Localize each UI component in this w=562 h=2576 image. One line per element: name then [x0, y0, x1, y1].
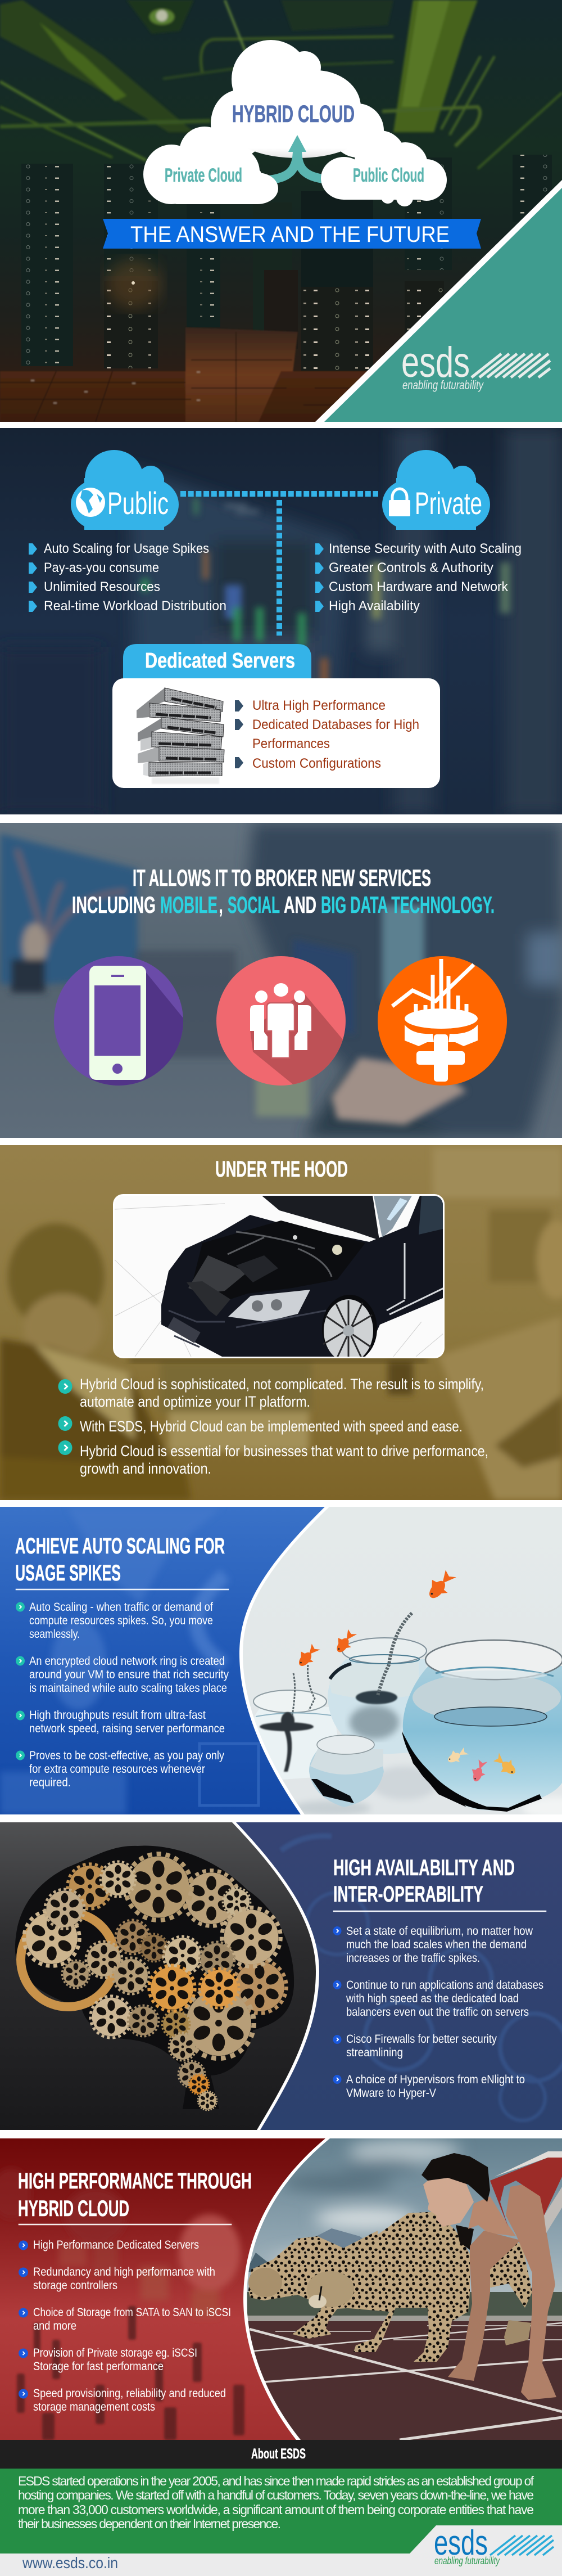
- bowl: front: [309, 1735, 384, 1807]
- list: performance points: Storage for fast performance: [33, 2359, 164, 2373]
- logo: esds blue: esds: [434, 2524, 488, 2563]
- icon: bullet one: [333, 1926, 342, 1935]
- cloud: public cloud: Public Cloud: [353, 165, 424, 186]
- panel: dedicated servers card: [112, 644, 440, 788]
- photo: car with open hood: [113, 1194, 445, 1363]
- icon: social group: [216, 956, 348, 1088]
- list: performance points: Speed provisioning, reliability and reduced: [33, 2386, 226, 2400]
- fish: jumping orange: [294, 1566, 459, 1670]
- list: performance points: High Performance Dedicated Servers: [33, 2238, 199, 2251]
- fish: in the large bowl: [445, 1745, 520, 1784]
- list: auto scaling points: around your VM to ensure that rich security: [29, 1668, 229, 1681]
- list: auto scaling points: for extra compute resources whenever: [29, 1763, 205, 1776]
- list: auto scaling points: compute resources spikes. So, you move: [29, 1614, 213, 1627]
- list: auto scaling points: An encrypted cloud network ring is created: [29, 1655, 225, 1668]
- list: availability points: streamlining: [346, 2046, 403, 2059]
- figure: sprinter: [422, 2151, 562, 2400]
- heading: HYBRID CLOUD: HYBRID CLOUD: [232, 101, 355, 128]
- panel: dark brain background: [0, 1822, 319, 2130]
- list: public benefits: [29, 541, 226, 614]
- list: dedicated server features: Custom Configurations: [252, 756, 381, 771]
- heading: high performance: HYBRID CLOUD: [18, 2196, 129, 2221]
- photo: runner and cheetahs: [236, 2138, 562, 2440]
- panel: hero with data-centre photo: [0, 0, 562, 422]
- icon: mobile: [54, 956, 183, 1091]
- panel: about ESDS text: ESDS started operations in the year 2005, and has since then made rapid strides as an established group of: [18, 2474, 534, 2488]
- icon: bullet two: [19, 2268, 28, 2277]
- decoration: teal corner triangle with white stripe: [315, 180, 562, 422]
- panel: about ESDS heading band: About ESDS: [251, 2446, 306, 2462]
- list: dedicated server features: [235, 698, 419, 771]
- list: under the hood points: [58, 1376, 488, 1477]
- list: auto scaling points: required.: [29, 1776, 71, 1789]
- icon: bullet one: [19, 2241, 28, 2250]
- list: auto scaling points: network speed, raising server performance: [29, 1722, 225, 1735]
- heading: under the hood: UNDER THE HOOD: [215, 1157, 348, 1182]
- heading: broker new services: MOBILE: [160, 891, 217, 918]
- bowl: left: [252, 1665, 338, 1780]
- cloud: public cloud: [321, 130, 447, 206]
- list: public benefits: Auto Scaling for Usage Spikes: [44, 541, 209, 556]
- logo: esds white: [402, 346, 551, 391]
- list: availability points: VMware to Hyper-V: [346, 2087, 436, 2100]
- panel: about ESDS text: their businesses dependent on their Internet presence.: [18, 2516, 281, 2531]
- heading: achieve auto scaling: ACHIEVE AUTO SCALING FOR: [15, 1534, 225, 1559]
- icon: bullet four: [16, 1750, 25, 1760]
- cloud: private cloud: Private Cloud: [165, 165, 242, 186]
- list: performance points: Redundancy and high performance with: [33, 2265, 215, 2278]
- list: under the hood points: automate and optimize your IT platform.: [80, 1393, 310, 1410]
- icon: bullet two: [333, 1980, 342, 1989]
- heading: high performance: [18, 2169, 252, 2225]
- heading: broker new services: ,: [219, 891, 223, 918]
- list: private benefits: [315, 541, 522, 614]
- icon: globe: [76, 488, 105, 517]
- cloud: private badge: Private: [415, 485, 482, 521]
- list: auto scaling points: [16, 1601, 229, 1789]
- photo: fish jumping between bowls: [225, 1507, 562, 1820]
- logo: esds white: esds: [401, 339, 470, 386]
- list: private benefits: Custom Hardware and Network: [329, 579, 509, 595]
- icon: teal bullet two: [58, 1416, 72, 1431]
- panel: navy text background: [225, 1822, 562, 2130]
- list: performance points: and more: [33, 2319, 76, 2332]
- photo: data centre background: [0, 0, 562, 422]
- icon: bullet three: [333, 2035, 342, 2044]
- logo: esds blue: [434, 2524, 554, 2566]
- cloud: public badge: Public: [107, 485, 169, 521]
- list: under the hood points: Hybrid Cloud is sophisticated, not complicated. The result is to simplify,: [80, 1376, 484, 1393]
- list: auto scaling points: High throughputs result from ultra-fast: [29, 1709, 206, 1722]
- list: under the hood points: Hybrid Cloud is essential for businesses that want to drive performance,: [80, 1443, 488, 1460]
- list: auto scaling points: seamlessly.: [29, 1628, 80, 1641]
- list: auto scaling points: is maintained while auto scaling takes place: [29, 1682, 227, 1695]
- icon: bullet three: [16, 1711, 25, 1720]
- icon: bullet four: [19, 2349, 28, 2358]
- panel: new services: [0, 823, 562, 1138]
- list: availability points: [333, 1925, 543, 2100]
- list: performance points: [19, 2238, 231, 2413]
- list: dedicated server features: Dedicated Databases for High: [252, 717, 419, 732]
- icon: teal bullet one: [58, 1379, 72, 1394]
- list: under the hood points: growth and innovation.: [80, 1460, 211, 1477]
- bowl: large: [402, 1640, 562, 1812]
- list: availability points: much the load scales when the demand: [346, 1938, 527, 1951]
- list: availability points: increases or the traffic spikes.: [346, 1952, 480, 1965]
- heading: high availability: INTER-OPERABILITY: [333, 1882, 483, 1907]
- icon: bullet five: [19, 2389, 28, 2398]
- heading: broker new services: [72, 864, 495, 918]
- photo: blurred server background: [0, 428, 562, 816]
- panel: dedicated servers card: Dedicated Servers: [145, 649, 295, 673]
- heading: broker new services: SOCIAL: [228, 891, 280, 918]
- bowl: medium: [328, 1613, 427, 1754]
- animal: rear cheetah: [248, 2231, 382, 2339]
- heading: achieve auto scaling: USAGE SPIKES: [15, 1561, 121, 1586]
- icon: bullet one: [16, 1602, 25, 1612]
- list: dedicated server features: Performances: [252, 736, 330, 751]
- list: public benefits: Unlimited Resources: [44, 579, 160, 595]
- cloud: public badge: [71, 450, 179, 530]
- photo: call-centre background in gold tint: [0, 1145, 562, 1500]
- cloud: hybrid cloud: [211, 40, 384, 158]
- animal: front cheetah: [307, 2212, 470, 2362]
- banner: the answer and the future: THE ANSWER AND THE FUTURE: [130, 222, 450, 247]
- panel: blue text background: [0, 1507, 329, 1814]
- panel: achieve auto scaling: [0, 1507, 562, 1820]
- heading: high performance: HIGH PERFORMANCE THROUGH: [18, 2169, 252, 2194]
- list: performance points: Provision of Private storage eg. iSCSI: [33, 2346, 197, 2359]
- cloud: private badge: [382, 450, 490, 530]
- list: private benefits: Intense Security with Auto Scaling: [329, 541, 522, 556]
- list: dedicated server features: Ultra High Performance: [252, 698, 386, 713]
- panel: high performance: [0, 2138, 562, 2440]
- panel: about ESDS text: [0, 2469, 562, 2554]
- photo: blurred touch-screen background: [0, 823, 562, 1138]
- panel: about ESDS heading band: [0, 2440, 562, 2469]
- illustration: brain made of gears: [15, 1846, 294, 2110]
- cloud: private cloud: [143, 127, 278, 204]
- panel: about ESDS text: hosting companies. We started off with a handful of customers. Today, seven years down-the-line, we have: [18, 2488, 534, 2502]
- panel: public, private and dedicated: [0, 428, 562, 816]
- list: private benefits: High Availability: [329, 598, 420, 614]
- heading: high availability: [333, 1856, 546, 1912]
- text: website: www.esds.co.in: [22, 2554, 118, 2572]
- panel: high availability: [0, 1822, 562, 2130]
- connector: dotted T line: [180, 494, 378, 636]
- list: availability points: Set a state of equilibrium, no matter how: [346, 1925, 533, 1938]
- icon: server stack: [137, 688, 224, 784]
- list: auto scaling points: Auto Scaling - when traffic or demand of: [29, 1601, 213, 1614]
- panel: under the hood: [0, 1145, 562, 1500]
- icon: bullet two: [16, 1656, 25, 1666]
- list: availability points: Cisco Firewalls for better security: [346, 2033, 497, 2046]
- list: performance points: storage controllers: [33, 2278, 117, 2292]
- list: public benefits: Pay-as-you consume: [44, 560, 159, 575]
- list: auto scaling points: Proves to be cost-effective, as you pay only: [29, 1749, 224, 1762]
- panel: red text background: [0, 2138, 330, 2440]
- heading: broker new services: INCLUDING: [72, 891, 156, 918]
- list: public benefits: Real-time Workload Distribution: [44, 598, 226, 614]
- panel: about ESDS text: more than 33,000 customers worldwide, a significant amount of them being corporate entities that have: [18, 2502, 534, 2517]
- arrow: merge arrow: [269, 135, 332, 180]
- list: performance points: storage management costs: [33, 2400, 155, 2413]
- icon: big data: [378, 956, 507, 1086]
- icon: bullet four: [333, 2075, 342, 2084]
- logo: esds blue: enabling futurability: [434, 2555, 500, 2566]
- list: availability points: A choice of Hypervisors from eNlight to: [346, 2073, 525, 2086]
- list: availability points: with high speed as the dedicated load: [346, 1992, 519, 2005]
- icon: bullet three: [19, 2308, 28, 2317]
- footer: website and logo: [0, 2524, 562, 2576]
- icon: padlock: [389, 489, 410, 516]
- heading: achieve auto scaling: [15, 1534, 229, 1590]
- list: availability points: balancers even out the traffic on servers: [346, 2006, 529, 2019]
- list: performance points: Choice of Storage from SATA to SAN to iSCSI: [33, 2305, 231, 2319]
- logo: esds white: enabling futurability: [402, 378, 484, 392]
- list: private benefits: Greater Controls & Authority: [329, 560, 493, 575]
- heading: broker new services: AND: [284, 891, 316, 918]
- list: under the hood points: With ESDS, Hybrid Cloud can be implemented with speed and ease.: [80, 1418, 463, 1435]
- icon: teal bullet three: [58, 1440, 72, 1455]
